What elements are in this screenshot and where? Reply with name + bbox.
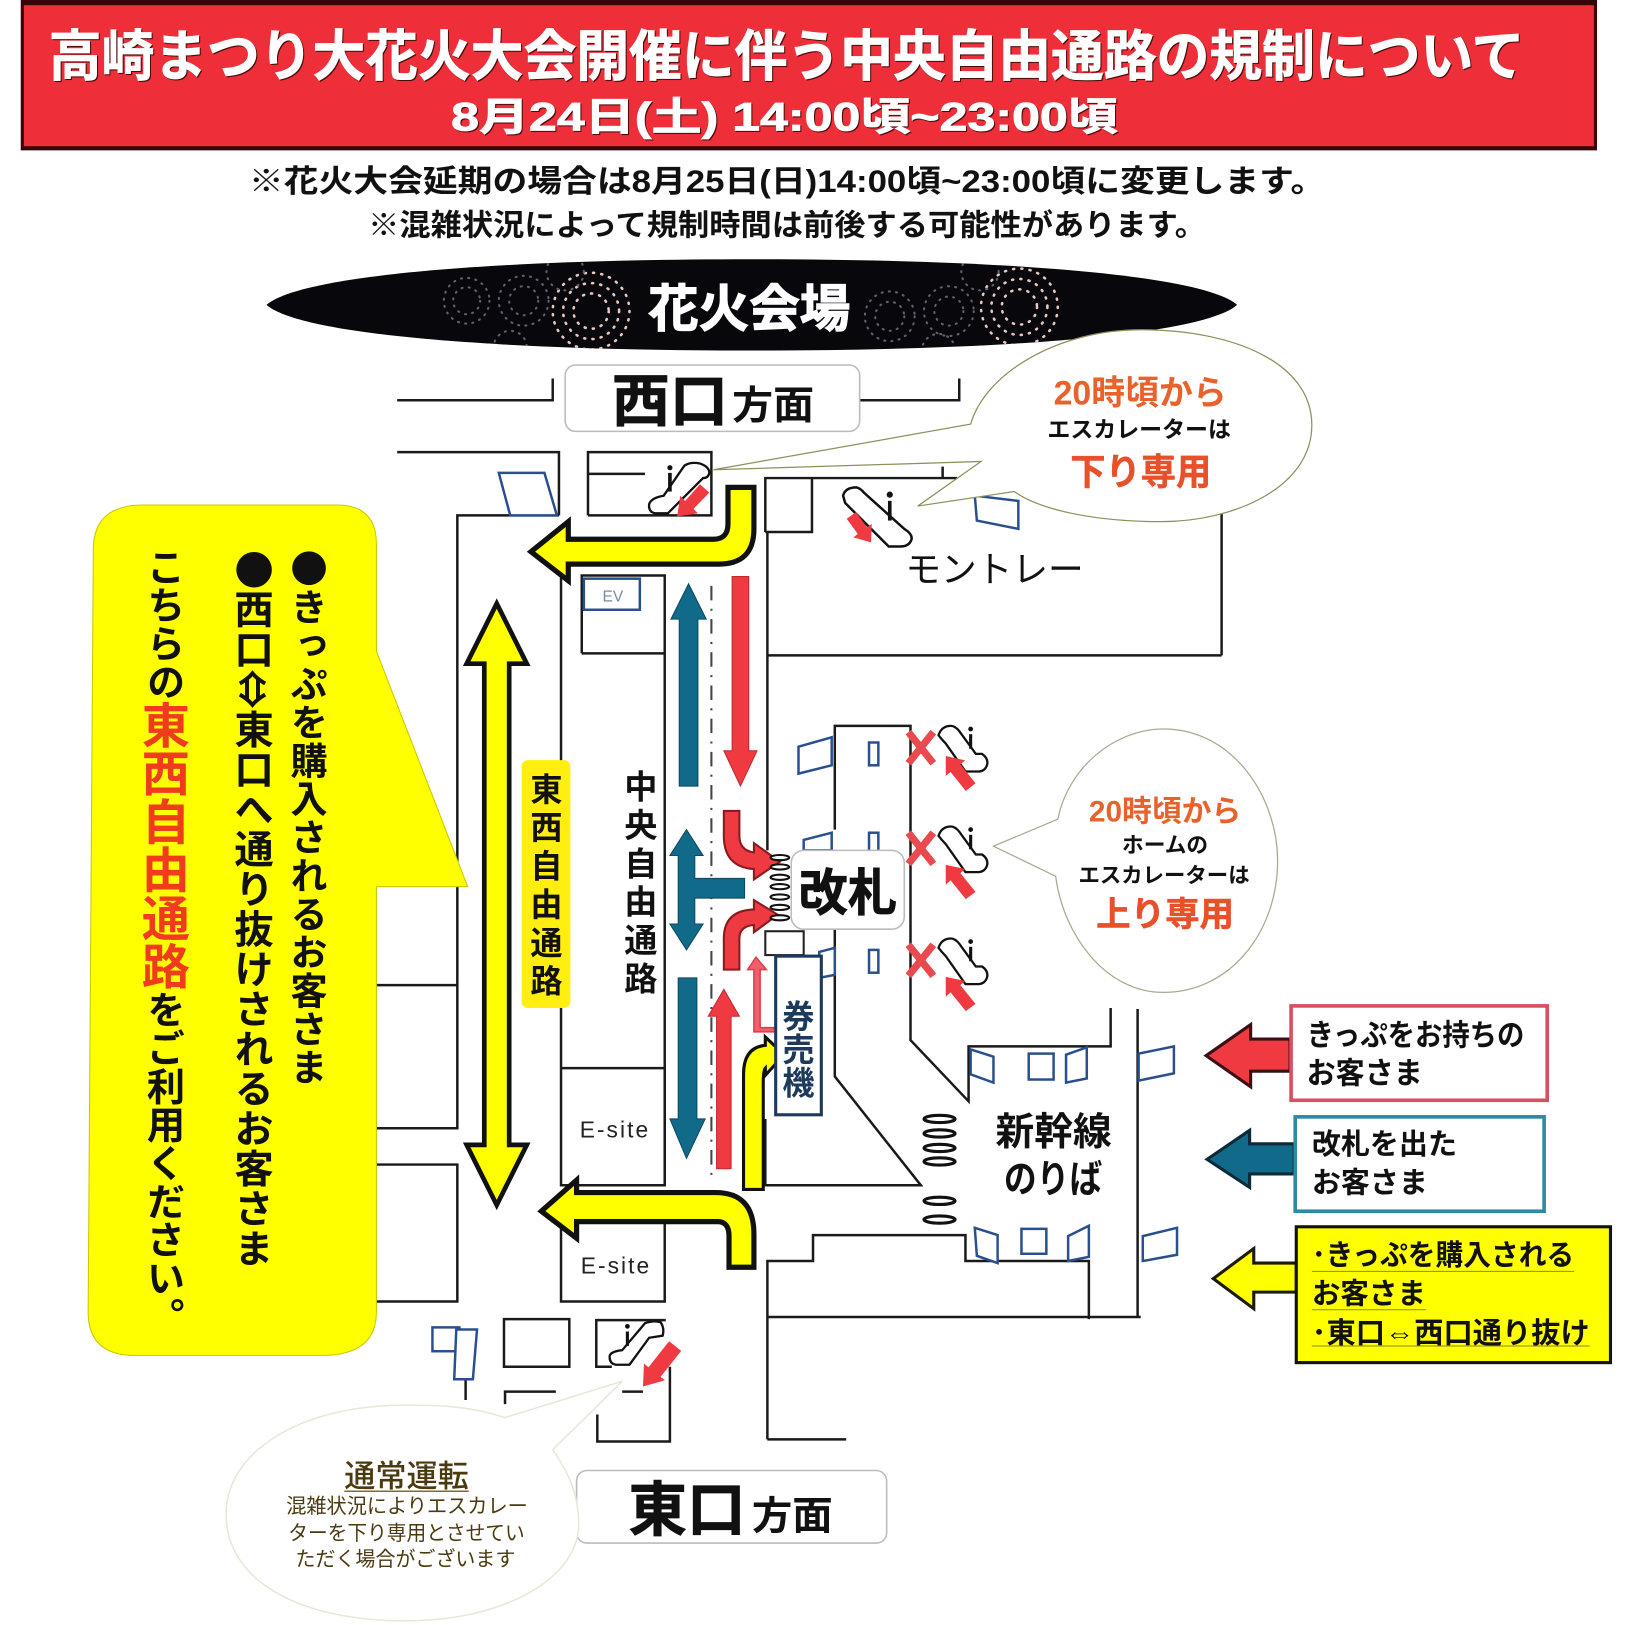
legend: ticket holders	[1206, 1006, 1547, 1100]
ticket machine label: 券売機	[776, 1000, 822, 1099]
E-site shop lower: E-site	[581, 1252, 649, 1278]
callout: 20時 down-only	[713, 330, 1312, 522]
shinkansen gate ovals	[924, 1115, 955, 1223]
yellow guidance panel: ●西口⇔東口へ通り抜けされるお客さま	[226, 550, 283, 1268]
escalator: home middle	[938, 826, 987, 899]
callout: normal operation: ただく場合がございます	[296, 1547, 515, 1571]
callout: normal operation: 通常運転	[344, 1459, 469, 1494]
callout: normal operation	[226, 1381, 622, 1621]
callout: 20時 up-only: ホームの	[1122, 832, 1208, 857]
blue lockers and doors	[432, 473, 1177, 1379]
legend: buying tickets and passing through	[1213, 1227, 1610, 1363]
callout: 20時 up-only: 上り専用	[1096, 896, 1234, 934]
west exit label	[565, 365, 860, 434]
ticket machine	[765, 931, 822, 1115]
callout: 20時 up-only: エスカレーターは	[1078, 863, 1250, 887]
red cross marks	[908, 732, 933, 976]
thin red arrow to gate	[748, 957, 776, 1032]
gate turnstiles	[771, 855, 789, 920]
title: 高崎まつり大花火大会開催に伴う中央自由通路の規制について	[49, 26, 1524, 88]
legend: exited gate	[1207, 1117, 1544, 1211]
callout: 20時 down-only: 下り専用	[1070, 451, 1211, 492]
red arrow down	[724, 577, 757, 786]
red arrow up	[708, 989, 739, 1169]
west exit label: 西口	[612, 370, 728, 434]
legend: buying tickets and passing through: お客さま	[1312, 1278, 1426, 1311]
callout: normal operation: ターを下り専用とさせてい	[288, 1522, 525, 1545]
legend: buying tickets and passing through: ･東口⇔西口通り抜け	[1312, 1317, 1590, 1350]
note: congestion: ※混雑状況によって規制時間は前後する可能性があります。	[368, 208, 1206, 242]
red arrow into gate lower	[724, 900, 778, 970]
callout: 20時 down-only: 20時頃から	[1054, 374, 1227, 412]
yellow double arrow	[467, 604, 527, 1205]
callout: 20時 up-only: 20時頃から	[1089, 795, 1241, 828]
east exit label: 東口	[628, 1477, 746, 1544]
header banner	[21, 0, 1597, 150]
Monterey label: モントレー	[905, 549, 1084, 590]
legend: buying tickets and passing through: ･きっぷを購入される	[1312, 1239, 1574, 1272]
shinkansen label	[996, 1111, 1112, 1202]
yellow arrow to ticket machine	[744, 1037, 784, 1189]
blue arrow down	[670, 978, 705, 1158]
venue label: 花火会場	[648, 281, 850, 338]
callout: 20時 down-only: エスカレーターは	[1047, 417, 1231, 443]
yellow arrow: east turn	[541, 1180, 754, 1267]
escalator: home upper	[938, 726, 987, 791]
west exit label: 方面	[732, 384, 814, 428]
east exit label: 方面	[752, 1495, 833, 1539]
blue arrow up	[671, 584, 706, 786]
fireworks venue banner	[266, 259, 1238, 350]
escalator: home lower	[938, 938, 987, 1011]
escalator: east	[610, 1321, 681, 1386]
yellow arrow: west turn	[531, 487, 754, 581]
east-west passage label: 東西自由通路	[524, 773, 570, 1003]
shinkansen label: のりば	[1004, 1159, 1102, 1202]
centre dash line	[710, 586, 712, 1182]
yellow guidance panel	[88, 505, 468, 1355]
EV label: EV	[603, 588, 624, 605]
yellow guidance panel: ●きっぷを購入されるお客さま	[282, 550, 336, 1087]
escalator: west	[649, 463, 709, 516]
central passage label: 中央自由通路	[617, 769, 665, 1000]
east exit label	[577, 1470, 887, 1544]
note: postponement: ※花火大会延期の場合は8月25日(日)14:00頃~23:00頃に変更します。	[249, 164, 1325, 199]
legend: exited gate: 改札を出た	[1312, 1128, 1457, 1161]
red arrow into gate upper	[724, 811, 780, 879]
legend: ticket holders: きっぷをお持ちの	[1307, 1019, 1524, 1052]
blue T arrow	[670, 830, 745, 950]
yellow guidance panel: こちらの 東西自由通路 をご利用ください。	[131, 548, 201, 1336]
callout: normal operation: 混雑状況によりエスカレー	[286, 1495, 528, 1518]
ticket gate box	[791, 850, 904, 929]
shinkansen label: 新幹線	[996, 1111, 1112, 1154]
ticket gate label: 改札	[799, 864, 897, 921]
callout: 20時 up-only	[993, 729, 1278, 992]
legend: exited gate: お客さま	[1312, 1167, 1428, 1200]
legend: ticket holders: お客さま	[1307, 1058, 1423, 1091]
date subtitle: 8月24日(土) 14:00頃~23:00頃	[451, 96, 1118, 140]
station floor plan	[376, 379, 1222, 1441]
E-site shop upper: E-site	[580, 1117, 648, 1143]
escalator: Monterey	[843, 487, 912, 547]
